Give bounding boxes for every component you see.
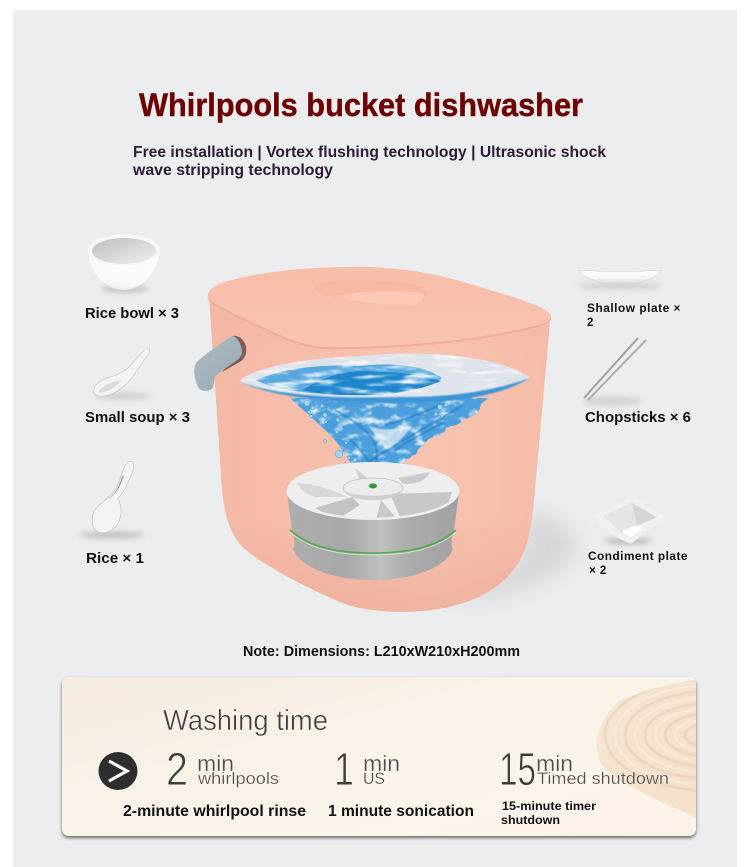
lid grip: [314, 280, 428, 305]
water droplets: [304, 400, 448, 470]
stat: 1 min US: min: [363, 751, 400, 776]
whirlpool funnel: [290, 398, 488, 485]
stat: 2 min whirlpools: whirlpools: [197, 769, 279, 788]
stat: 15 min timed shutdown: min: [536, 751, 573, 776]
item: shallow plate: Shallow plate ×: [587, 303, 681, 315]
stat: 1 min US: 1 minute sonication: [328, 803, 474, 820]
item: small soup spoon: Small soup × 3: [85, 410, 190, 426]
water vortex: [240, 354, 530, 485]
stat: 1 min US: US: [363, 769, 385, 788]
item: condiment plate: [588, 499, 692, 577]
stat: 1 min US: [328, 743, 474, 820]
stat: 15 min timed shutdown: 15-minute timer: [502, 801, 597, 813]
washer unit: [286, 462, 460, 580]
stat: 1 min US: 1: [334, 743, 354, 795]
stat: 15 min timed shutdown: shutdown: [501, 815, 560, 827]
stat: 15 min timed shutdown: 15: [499, 743, 536, 795]
item: rice bowl: [85, 234, 179, 322]
subtitle: [132, 144, 606, 179]
product: pink bucket dishwasher: [194, 267, 574, 612]
stat: 15 min timed shutdown: Timed shutdown: [537, 769, 669, 788]
bucket lid: [208, 267, 551, 349]
stat: 2 min whirlpools: min: [197, 751, 234, 776]
item: condiment plate: Condiment plate: [588, 551, 688, 563]
item: rice spoon: Rice × 1: [86, 551, 144, 567]
subtitle: Free installation | Vortex flushing technology | Ultrasonic shock: [133, 144, 606, 161]
item: chopsticks: Chopsticks × 6: [585, 410, 691, 426]
icon: arrow badge: [98, 752, 138, 790]
item: rice bowl: Rice bowl × 3: [85, 306, 179, 322]
stat: 2 min whirlpools: 2: [166, 743, 188, 795]
bucket body: [209, 296, 550, 612]
item: rice spoon: [79, 461, 145, 567]
heading: washing time: Washing time: [163, 705, 328, 737]
note: dimensions: Note: Dimensions: L210xW210xH200mm: [243, 644, 520, 660]
item: small soup spoon: [85, 347, 190, 426]
wood coaster: [596, 680, 696, 817]
stat: 15 min timed shutdown: [499, 743, 669, 827]
stat: 2 min whirlpools: [123, 743, 306, 820]
subtitle: wave stripping technology: [132, 162, 333, 179]
floor shadow: [450, 510, 574, 606]
icon: side handle: [194, 336, 246, 391]
item: shallow plate: 2: [587, 317, 594, 329]
item: chopsticks: [582, 338, 691, 426]
item: shallow plate: [578, 270, 685, 329]
title: Whirlpools bucket dishwasher: [139, 87, 583, 123]
stat: 2 min whirlpools: 2-minute whirlpool rinse: [123, 803, 306, 820]
water surface: [240, 354, 530, 402]
item: condiment plate: × 2: [589, 565, 607, 577]
panel: washing time: [62, 677, 750, 836]
